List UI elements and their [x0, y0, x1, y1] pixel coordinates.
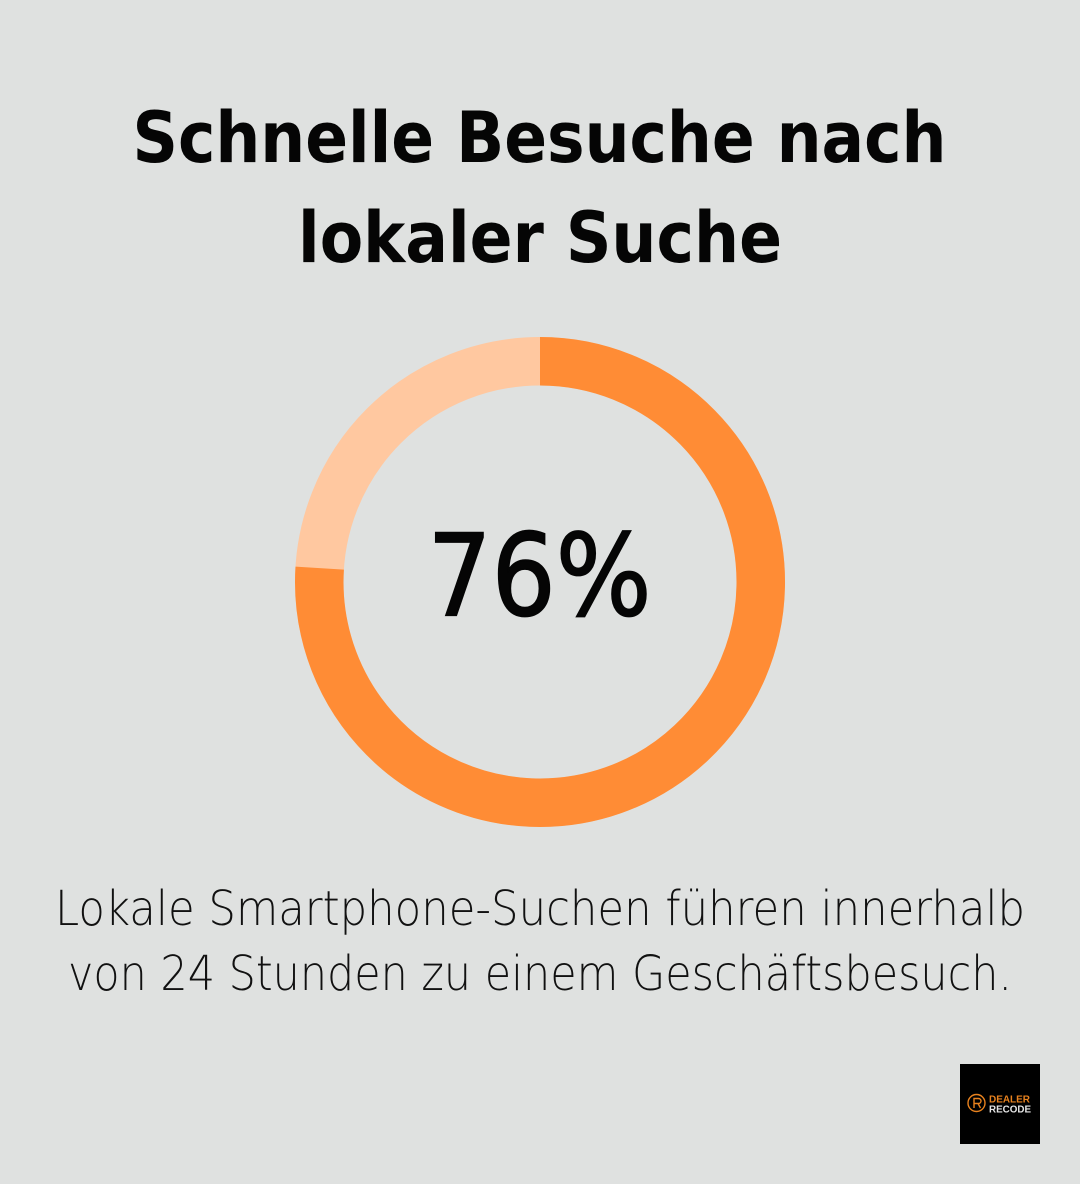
logo: Dealer Recode [960, 1064, 1040, 1144]
title: Schnelle Besuche nach [132, 97, 946, 179]
donut value: 76% [428, 510, 652, 642]
title [132, 97, 946, 279]
logo wordmark: RECODE [989, 1104, 1031, 1116]
title: lokaler Suche [298, 197, 782, 279]
logo icon [968, 1094, 985, 1112]
logo wordmark: DEALER [989, 1094, 1030, 1106]
logo wordmark [989, 1094, 1031, 1116]
description [55, 881, 1025, 1002]
donut chart: 76% [319, 361, 761, 803]
